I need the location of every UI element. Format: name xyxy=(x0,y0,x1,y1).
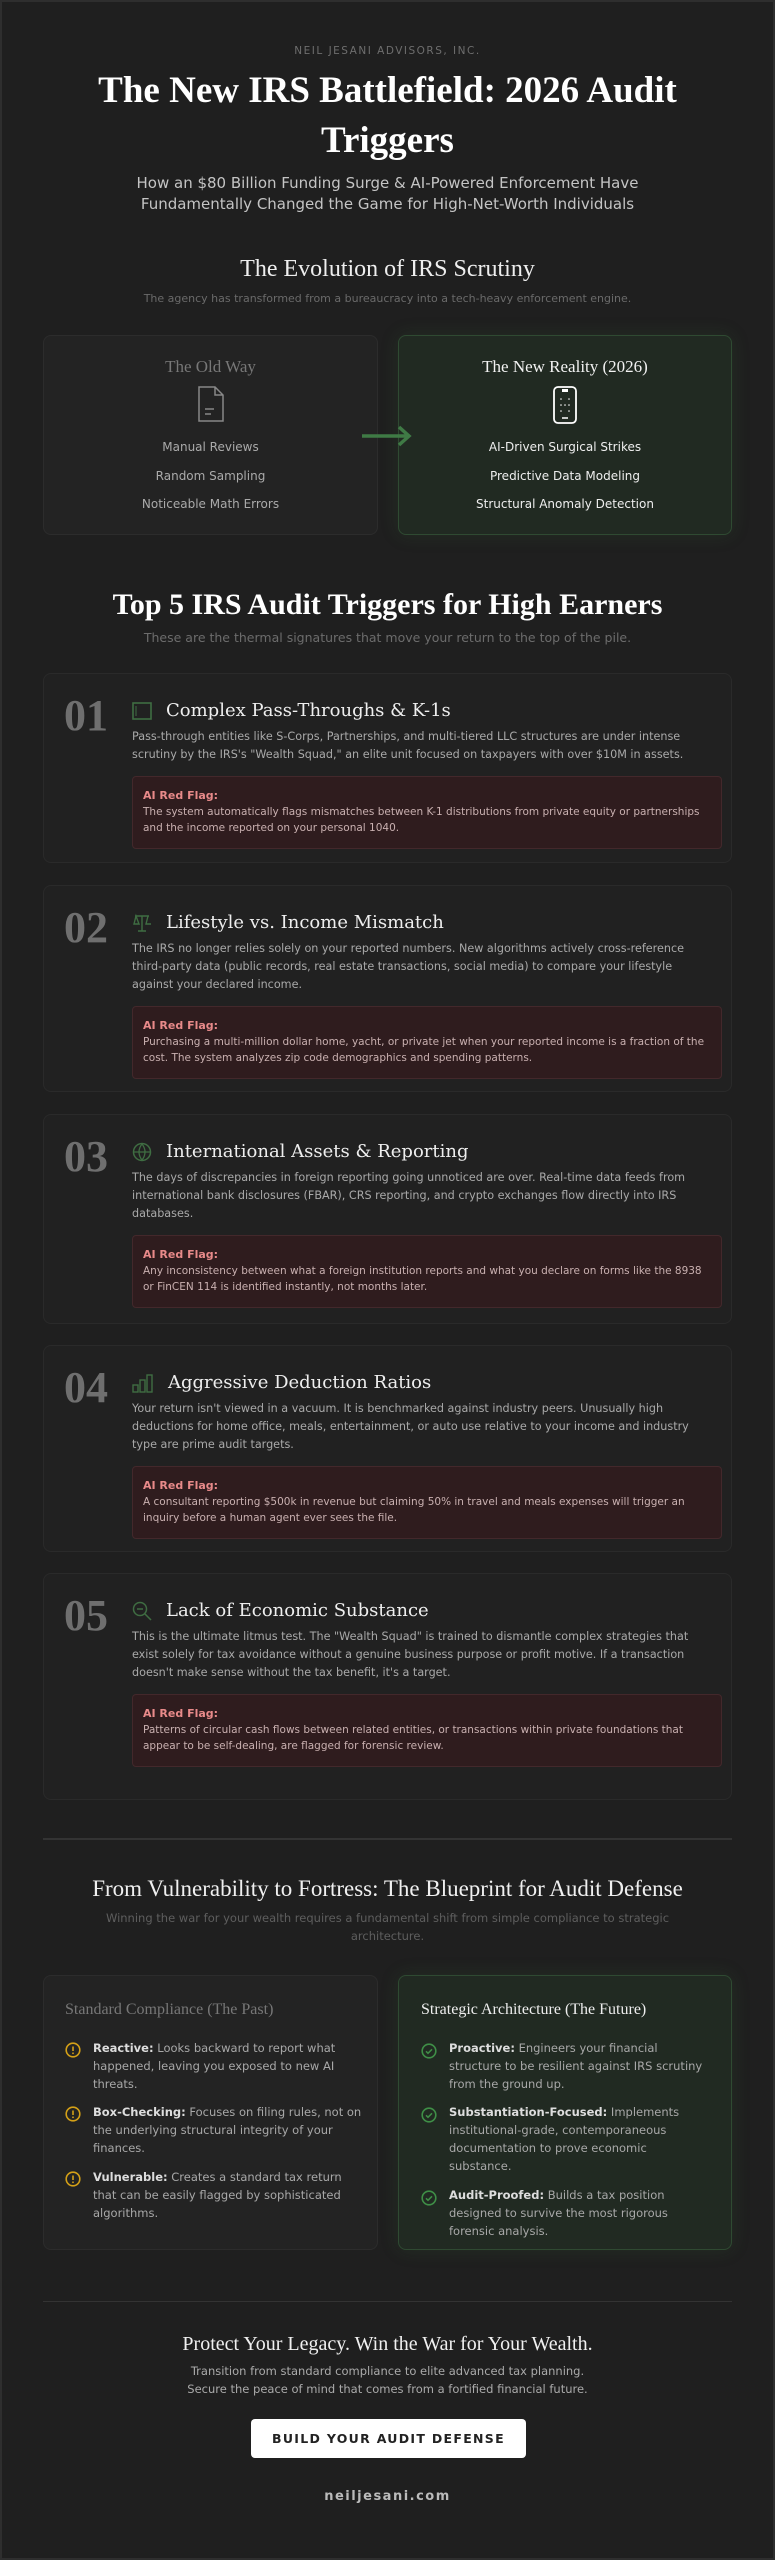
cta text: Transition from standard compliance to elite advanced tax planning. xyxy=(191,2364,584,2378)
card 04: Your return isn't viewed in a vacuum. It is benchmarked against industry peers. Unusually high deductions for home office, meals, entertainment, or auto use relative to your income and industry type are prime audit targets. xyxy=(132,1402,689,1451)
card 05: This is the ultimate litmus test. The "Wealth Squad" is trained to dismantle complex strategies that exist solely for tax avoidance without a genuine business purpose or profit motive. If a transaction doesn't make sense without the tax benefit, it's a target. xyxy=(132,1630,688,1679)
card 01: Pass-through entities like S-Corps, Partnerships, and multi-tiered LLC structures are under intense scrutiny by the IRS's "Wealth Squad," an elite unit focused on taxpayers with over $10M in assets. xyxy=(132,730,683,761)
red flag 05 xyxy=(132,1694,722,1767)
panel: new reality xyxy=(398,335,732,535)
heading: blueprint: From Vulnerability to Fortress: The Blueprint for Audit Defense xyxy=(92,1876,683,1901)
old way list xyxy=(142,440,279,511)
top 5 subtitle: These are the thermal signatures that move your return to the top of the pile. xyxy=(144,630,631,645)
card 02 title: Lifestyle vs. Income Mismatch xyxy=(166,912,444,933)
button: BUILD YOUR AUDIT DEFENSE xyxy=(272,2431,505,2446)
card 05 title: Lack of Economic Substance xyxy=(166,1600,429,1621)
panel: standard compliance xyxy=(43,1975,378,2250)
old way list: Random Sampling xyxy=(156,468,265,482)
new reality title: The New Reality (2026) xyxy=(482,357,648,376)
old way list: Noticeable Math Errors xyxy=(142,497,279,511)
card 01: 01 xyxy=(64,691,108,740)
red flag 02 xyxy=(132,1006,722,1079)
icon: phone xyxy=(553,386,577,424)
item audit-proofed: Audit-Proofed: Builds a tax position designed to survive the most rigorous forensic analysis. xyxy=(449,2188,668,2238)
blueprint subtitle: Winning the war for your wealth requires a fundamental shift from simple compliance to strategic architecture. xyxy=(106,1911,669,1943)
cta heading: Protect Your Legacy. Win the War for Your Wealth. xyxy=(182,2333,593,2355)
brand: NEIL JESANI ADVISORS, INC. xyxy=(294,45,481,57)
new reality list: Predictive Data Modeling xyxy=(490,468,640,482)
evolution subtitle: The agency has transformed from a bureaucracy into a tech-heavy enforcement engine. xyxy=(144,292,631,305)
red flag 03: Any inconsistency between what a foreign institution reports and what you declare on forms like the 8938 or FinCEN 114 is identified instantly, not months later. xyxy=(143,1265,702,1293)
card 02: 02 xyxy=(64,903,108,952)
red flag 01: AI Red Flag: xyxy=(143,789,218,802)
panel: strategic architecture xyxy=(398,1975,732,2250)
arrow xyxy=(362,426,412,446)
cta text: Secure the peace of mind that comes from a fortified financial future. xyxy=(187,2382,588,2396)
heading: top 5: Top 5 IRS Audit Triggers for High Earners xyxy=(113,588,662,621)
card 03: 03 xyxy=(64,1132,108,1181)
card 04: 04 xyxy=(64,1363,108,1412)
card 01 title: Complex Pass-Throughs & K-1s xyxy=(166,700,451,721)
icon: document xyxy=(198,386,224,422)
old way list: Manual Reviews xyxy=(162,440,259,454)
card 04 title: Aggressive Deduction Ratios xyxy=(168,1372,431,1393)
button xyxy=(251,2419,526,2458)
strategic title: Strategic Architecture (The Future) xyxy=(421,2001,646,2018)
new reality list xyxy=(476,440,654,511)
footer url: neiljesani.com xyxy=(324,2489,451,2504)
red flag 03 xyxy=(132,1235,722,1308)
cta text xyxy=(187,2364,588,2396)
panel: old way xyxy=(43,335,378,535)
subtitle xyxy=(137,174,638,213)
card 01 xyxy=(43,673,732,863)
old way title: The Old Way xyxy=(165,357,256,376)
red flag 02: AI Red Flag: xyxy=(143,1019,218,1032)
red flag 01: The system automatically flags mismatches between K-1 distributions from private equity or partnerships and the income reported on your personal 1040. xyxy=(143,806,700,834)
red flag 04: AI Red Flag: xyxy=(143,1479,218,1492)
card 05 xyxy=(43,1573,732,1800)
red flag 05: AI Red Flag: xyxy=(143,1707,218,1720)
card 02: The IRS no longer relies solely on your reported numbers. New algorithms actively cross-reference third-party data (public records, real estate transactions, social media) to compare your lifestyle against your declared income. xyxy=(132,942,684,991)
title: The New IRS Battlefield: 2026 Audit Triggers xyxy=(98,70,677,161)
item proactive: Proactive: Engineers your financial structure to be resilient against IRS scrutiny from the ground up. xyxy=(449,2041,702,2091)
red flag 02: Purchasing a multi-million dollar home, yacht, or private jet when your reported income is a fraction of the cost. The system analyzes zip code demographics and spending patterns. xyxy=(143,1036,704,1064)
red flag 03: AI Red Flag: xyxy=(143,1248,218,1261)
subtitle: Fundamentally Changed the Game for High-Net-Worth Individuals xyxy=(141,195,634,213)
card 02 xyxy=(43,885,732,1092)
card 03 title: International Assets & Reporting xyxy=(166,1141,468,1162)
item substantiation: Substantiation-Focused: Implements institutional-grade, contemporaneous documentation to prove economic substance. xyxy=(449,2105,679,2173)
item reactive: Reactive: Looks backward to report what happened, leaving you exposed to new AI threats. xyxy=(93,2041,335,2091)
card 05: 05 xyxy=(64,1591,108,1640)
item box-checking: Box-Checking: Focuses on filing rules, not on the underlying structural integrity of your finances. xyxy=(93,2105,361,2155)
red flag 05: Patterns of circular cash flows between related entities, or transactions within private foundations that appear to be self-dealing, are flagged for forensic review. xyxy=(143,1724,683,1752)
red flag 01 xyxy=(132,776,722,849)
standard title: Standard Compliance (The Past) xyxy=(65,2001,273,2018)
new reality list: AI-Driven Surgical Strikes xyxy=(489,440,641,454)
subtitle: How an $80 Billion Funding Surge & AI-Powered Enforcement Have xyxy=(137,174,638,192)
heading: evolution: The Evolution of IRS Scrutiny xyxy=(240,256,535,282)
new reality list: Structural Anomaly Detection xyxy=(476,497,654,511)
red flag 04 xyxy=(132,1466,722,1539)
card 03 xyxy=(43,1114,732,1324)
item vulnerable: Vulnerable: Creates a standard tax return that can be easily flagged by sophisticated algorithms. xyxy=(93,2170,342,2220)
card 03: The days of discrepancies in foreign reporting going unnoticed are over. Real-time data feeds from international bank disclosures (FBAR), CRS reporting, and crypto exchanges flow directly into IRS databases. xyxy=(132,1171,685,1220)
card 04 xyxy=(43,1345,732,1552)
red flag 04: A consultant reporting $500k in revenue but claiming 50% in travel and meals expenses will trigger an inquiry before a human agent ever sees the file. xyxy=(143,1496,685,1524)
